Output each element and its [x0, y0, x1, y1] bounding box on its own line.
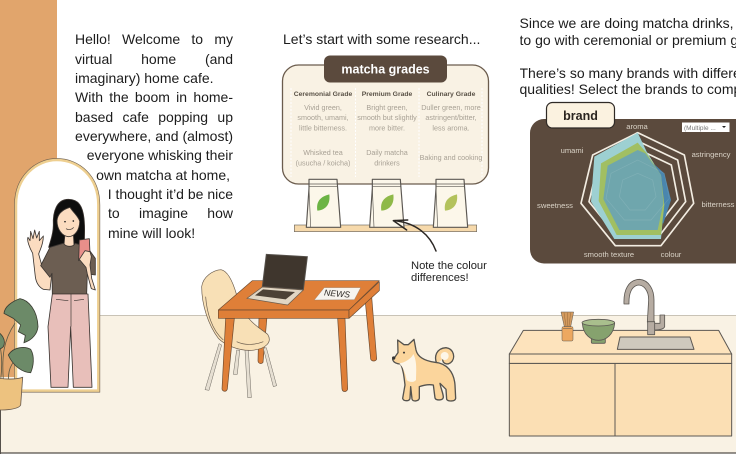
intro paragraph: to imagine how: [108, 205, 233, 221]
column: premium grade: [357, 91, 417, 168]
brand selection text: [520, 15, 736, 97]
column: ceremonial grade: Ceremonial Grade: [294, 91, 352, 98]
intro paragraph: mine will look!: [108, 225, 195, 241]
radar chart: [581, 133, 694, 246]
column: ceremonial grade: [294, 91, 352, 168]
newspaper: [314, 288, 361, 300]
radar axis labels: umami: [561, 146, 584, 155]
column: premium grade: Bright green,: [366, 103, 408, 112]
column: culinary grade: less aroma.: [432, 124, 470, 132]
matcha bag: culinary: [433, 179, 468, 227]
radar axis labels: sweetness: [537, 201, 573, 210]
column: premium grade: drinkers: [374, 158, 400, 168]
dropdown filter: [682, 122, 730, 132]
radar axis labels: colour: [661, 250, 682, 259]
kitchen counter: [509, 279, 732, 436]
column: culinary grade: astringent/bitter,: [425, 113, 477, 122]
brand selection text: There’s so many brands with differe: [520, 65, 736, 81]
column: ceremonial grade: little bitterness.: [299, 124, 347, 132]
intro paragraph: Hello! Welcome to my: [75, 31, 233, 47]
column: culinary grade: Duller green, more: [421, 103, 481, 112]
radar axis labels: [537, 122, 735, 259]
phone and hand: [79, 239, 90, 261]
shelf with matcha bags: [294, 179, 477, 232]
radar axis labels: bitterness: [702, 200, 735, 209]
column: ceremonial grade: smooth, umami,: [297, 113, 349, 122]
floor: [0, 315, 736, 454]
column: ceremonial grade: Vivid green,: [304, 103, 342, 112]
heading: matcha grades: matcha grades: [341, 62, 430, 76]
column: culinary grade: Culinary Grade: [427, 91, 476, 98]
matcha bag: ceremonial: [306, 179, 341, 227]
shiba dog: [392, 339, 456, 401]
column: premium grade: more bitter.: [369, 124, 405, 132]
brand selection text: qualities! Select the brands to comp: [520, 81, 736, 97]
rear desk legs: [258, 297, 377, 363]
woman: [28, 199, 95, 387]
column: culinary grade: Baking and cooking: [420, 153, 482, 162]
annotation: note the colour differences: differences!: [411, 272, 469, 284]
brand selection text: Since we are doing matcha drinks,: [520, 15, 734, 31]
dropdown filter: (Multiple ...: [684, 125, 716, 132]
brand selection text: to go with ceremonial or premium g: [520, 32, 736, 48]
potted plant: [0, 299, 38, 410]
intro paragraph: everyone whisking their: [87, 147, 233, 163]
column: premium grade: Daily matcha: [366, 148, 408, 157]
heading: matcha grades: [324, 56, 447, 82]
brand tab: brand: [563, 109, 598, 123]
shirt: [41, 243, 95, 294]
desk: [218, 281, 379, 391]
laptop: [262, 254, 307, 290]
raised arm: [28, 230, 52, 290]
column: culinary grade: [420, 91, 482, 162]
intro paragraph: imaginary) home cafe.: [75, 70, 214, 86]
arrow to colour differences: [393, 220, 436, 251]
annotation: note the colour differences: Note the colour: [411, 260, 487, 272]
intro paragraph: everywhere, and (almost): [75, 128, 233, 144]
faucet: [624, 279, 665, 335]
intro paragraph: I thought it’d be nice: [108, 186, 233, 202]
chair and desk: [202, 254, 379, 398]
matcha bag: premium: [370, 179, 404, 227]
column: ceremonial grade: (usucha / koicha): [296, 158, 350, 168]
intro paragraph: based cafe popping up: [75, 109, 233, 125]
column: premium grade: Premium Grade: [362, 91, 413, 98]
brand tab: [546, 102, 614, 128]
radar axis labels: aroma: [626, 122, 649, 131]
mirror with woman: [16, 160, 98, 391]
chair and desk: NEWS: [324, 287, 351, 300]
pants: [48, 294, 92, 387]
intro paragraph: own matcha at home,: [96, 167, 230, 183]
column: ceremonial grade: Whisked tea: [303, 148, 343, 157]
bamboo whisk: [561, 312, 574, 341]
intro paragraph: virtual home (and: [75, 51, 233, 67]
sink: [617, 337, 694, 349]
column: premium grade: smooth but slightly: [357, 113, 417, 122]
matcha bowl: [582, 319, 615, 343]
radar axis labels: astringency: [692, 150, 731, 159]
radar axis labels: smooth texture: [584, 250, 634, 259]
intro paragraph: With the boom in home-: [75, 89, 233, 105]
panel: brand radar chart: [530, 119, 736, 264]
chair: [202, 270, 269, 350]
orange wall band: [0, 0, 57, 377]
panel: matcha grades: [282, 56, 488, 184]
research heading: Let’s start with some research...: [283, 31, 480, 47]
